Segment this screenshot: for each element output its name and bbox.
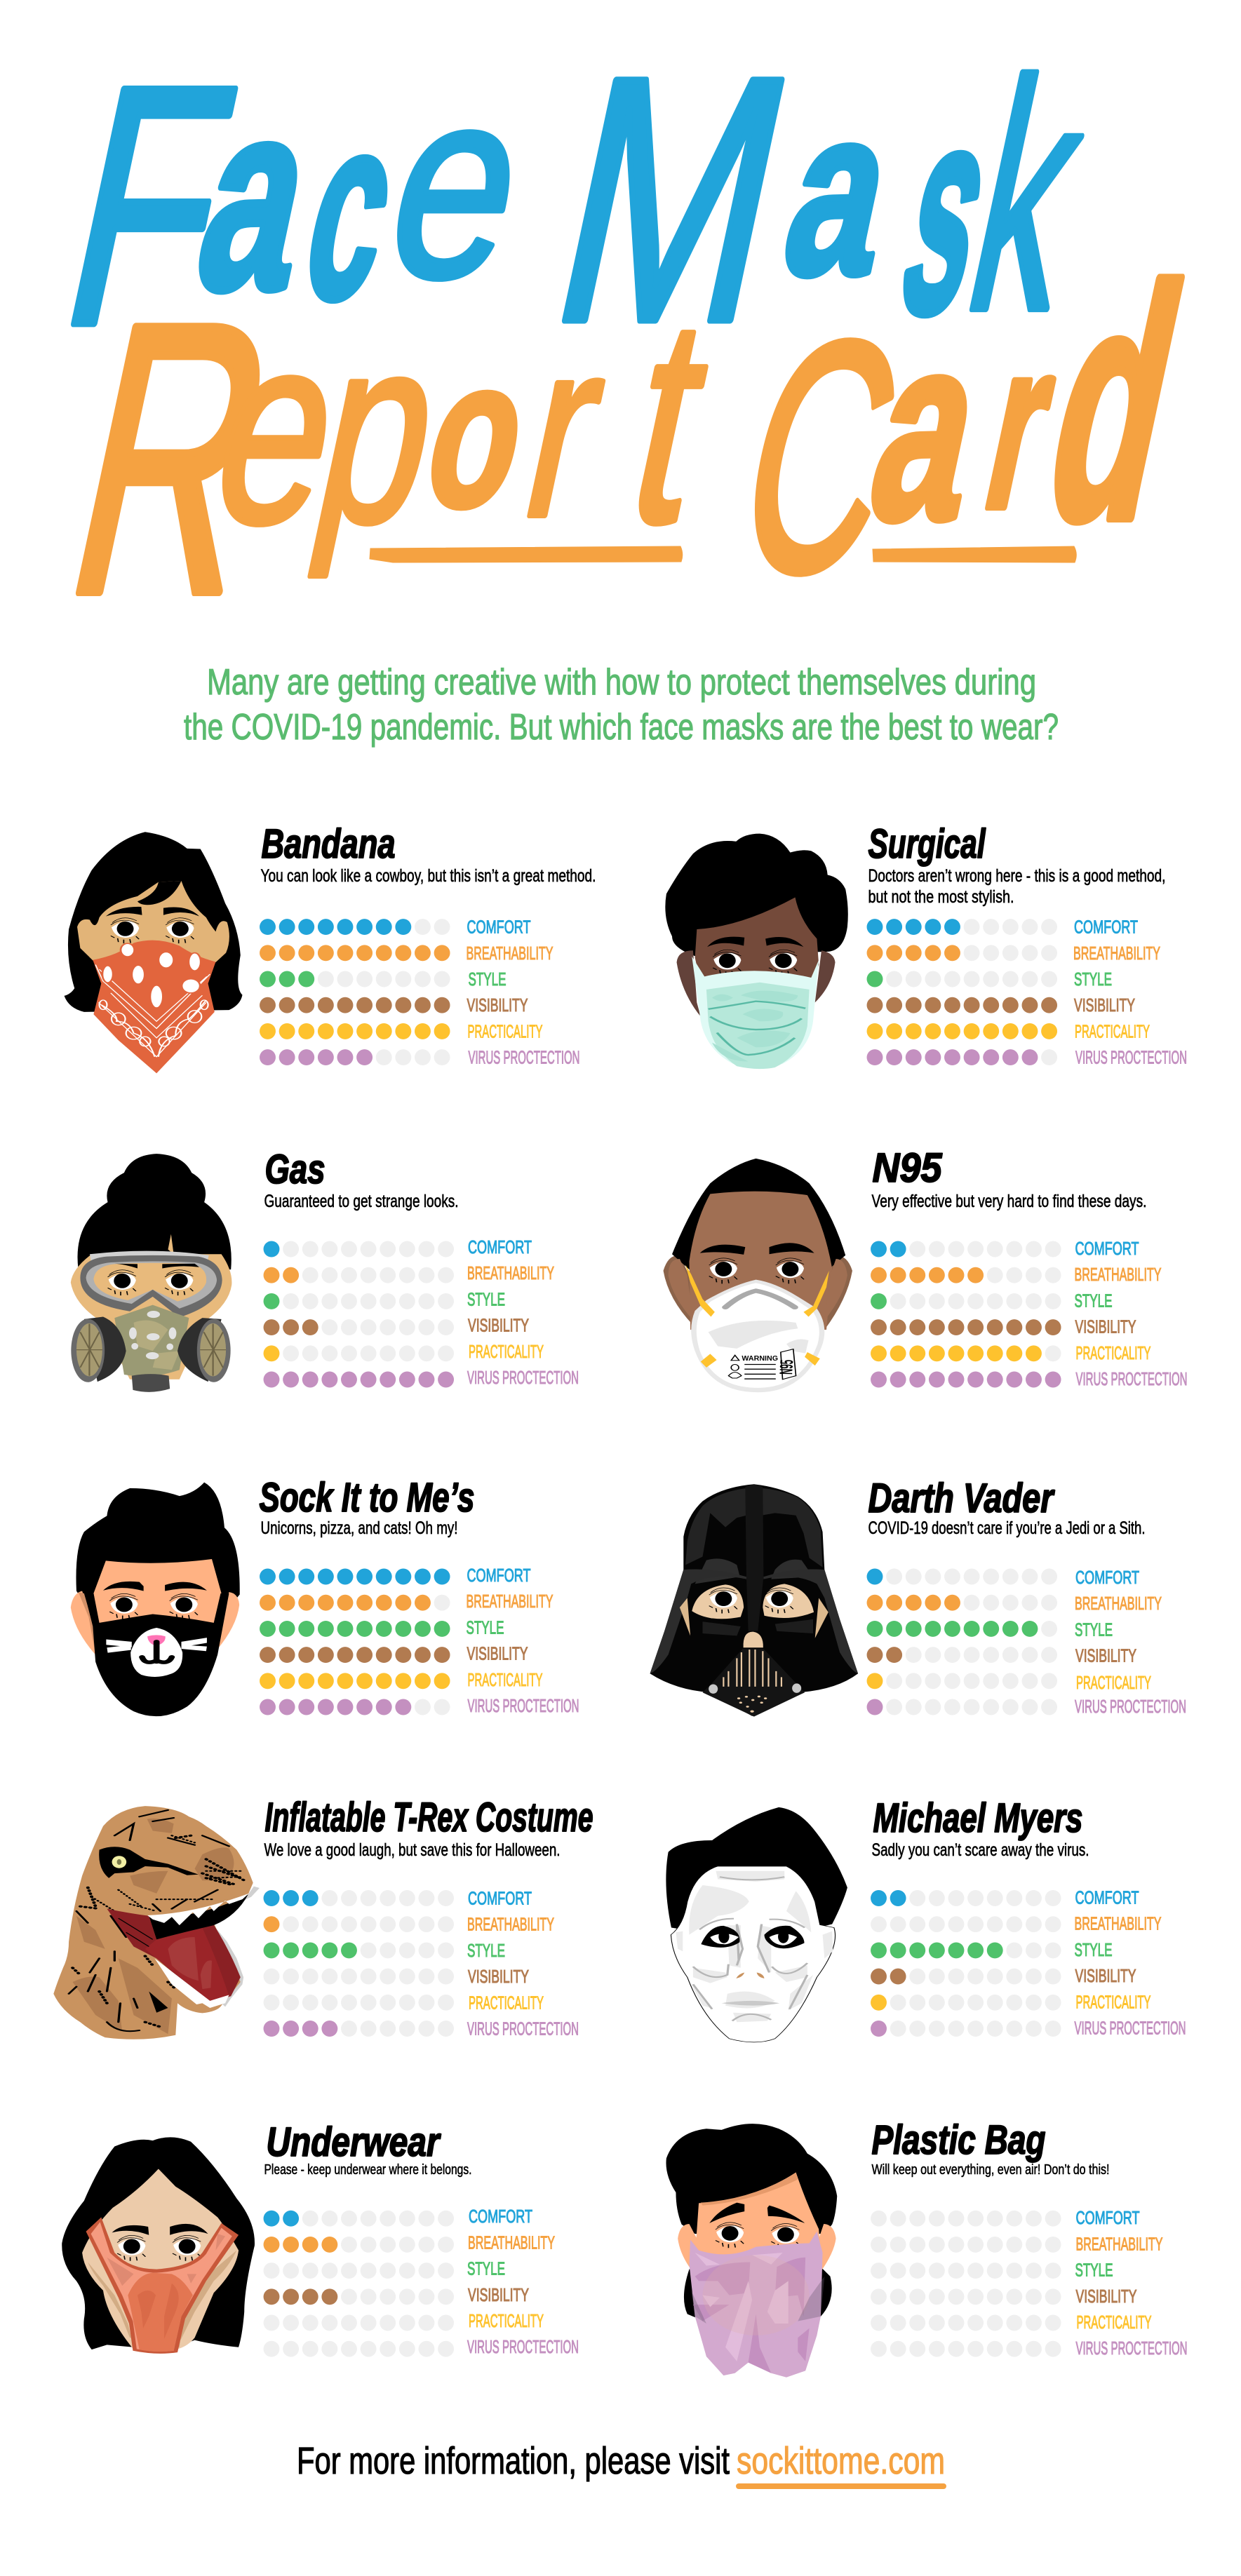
panel: N95 [664, 1145, 1187, 1392]
illustration: underwear face [62, 2137, 255, 2354]
title: Face Mask: F [39, 15, 260, 396]
rating: comfort: COMFORT [1076, 2207, 1140, 2228]
rating: breathability: BREATHABILITY [466, 943, 553, 964]
title: Face Mask [39, 5, 1113, 396]
intro text [184, 662, 1059, 748]
title: Face Mask: c [285, 63, 419, 352]
ratings: Surgical [875, 917, 1187, 1068]
ratings: Underwear [271, 2206, 579, 2357]
rating: breathability: BREATHABILITY [467, 1262, 554, 1283]
ratings: Bandana [268, 917, 579, 1068]
heading: Plastic Bag: Plastic Bag [871, 2117, 1045, 2163]
intro text: Many are getting creative with how to protect themselves during [207, 662, 1036, 703]
rating: comfort: COMFORT [1075, 1238, 1139, 1259]
ratings: Sock It to Me's [268, 1565, 579, 1716]
title: Report Card [41, 220, 1207, 674]
rating: visibility: VISIBILITY [468, 1315, 529, 1336]
rating: practicality: PRACTICALITY [1076, 1672, 1151, 1693]
surgical mask [692, 957, 819, 1069]
ratings: Inflatable T-Rex Costume [271, 1888, 579, 2039]
title: Report Card: o [409, 317, 546, 551]
rating: comfort: COMFORT [1074, 917, 1138, 938]
ratings: Michael Myers [878, 1887, 1186, 2038]
rating: visibility: VISIBILITY [1075, 1316, 1136, 1337]
rating: practicality: PRACTICALITY [1075, 1020, 1150, 1041]
rating: virus protection: VIRUS PROCTECTION [467, 2336, 579, 2357]
rating: breathability: BREATHABILITY [1073, 943, 1160, 964]
heading: N95: N95 [873, 1145, 942, 1191]
description: Surgical: but not the most stylish. [868, 887, 1014, 907]
cat face mask [85, 1593, 229, 1716]
panel: Bandana [65, 821, 596, 1073]
bandana mask [93, 940, 215, 1073]
description: Darth Vader: COVID-19 doesn’t care if you’re a Jedi or a Sith. [868, 1518, 1145, 1538]
heading: Michael Myers: Michael Myers [873, 1795, 1083, 1841]
illustration: bandana face [65, 832, 242, 1073]
rating: virus protection: VIRUS PROCTECTION [467, 1695, 579, 1716]
rating: comfort: COMFORT [467, 1565, 531, 1586]
panel: Gas [71, 1147, 579, 1392]
panel: Sock It to Me's [71, 1475, 579, 1716]
panel: Plastic Bag [666, 2117, 1187, 2378]
rating: visibility: VISIBILITY [467, 994, 528, 1016]
title: Report Card: t [608, 257, 733, 583]
rating: style: STYLE [467, 1940, 505, 1961]
title: Report Card: r [505, 288, 626, 569]
title: Face Mask: a [178, 48, 336, 345]
rating: comfort: COMFORT [469, 2206, 532, 2227]
rating: visibility: VISIBILITY [468, 1966, 529, 1987]
title: Report Card: e [193, 279, 365, 579]
description: Plastic Bag: Will keep out everything, even air! Don’t do this! [871, 2162, 1110, 2178]
footer text: For more information, please visit [297, 2440, 730, 2482]
illustration: N95 face [664, 1159, 852, 1392]
rating: breathability: BREATHABILITY [467, 1914, 554, 1935]
illustration: surgical face [665, 834, 848, 1069]
respirator [71, 1305, 231, 1392]
rating: style: STYLE [1075, 2260, 1113, 2281]
rating: style: STYLE [1074, 969, 1112, 990]
title: Report Card: r [967, 291, 1075, 558]
panel: Underwear [62, 2119, 579, 2357]
rating: visibility: VISIBILITY [1074, 994, 1135, 1016]
description: Surgical [868, 866, 1166, 907]
rating: style: STYLE [469, 969, 507, 990]
illustration: plastic bag face [666, 2124, 837, 2378]
description: N95: Very effective but very hard to find these days. [871, 1192, 1146, 1211]
title: Report Card: C [715, 273, 927, 640]
rating: practicality: PRACTICALITY [469, 1341, 544, 1362]
rating: practicality: PRACTICALITY [469, 2310, 544, 2331]
plastic bag mask [689, 2232, 824, 2378]
description: Underwear: Please - keep underwear where it belongs. [264, 2162, 471, 2178]
panel: Michael Myers [666, 1795, 1186, 2042]
rating: breathability: BREATHABILITY [1075, 1264, 1162, 1285]
rating: style: STYLE [1075, 1939, 1113, 1960]
panel: Surgical [665, 821, 1187, 1069]
rating: breathability: BREATHABILITY [466, 1591, 553, 1612]
rating: comfort: COMFORT [1075, 1887, 1139, 1908]
rating: style: STYLE [1075, 1619, 1113, 1640]
description: Gas: Guaranteed to get strange looks. [264, 1192, 459, 1211]
rating: visibility: VISIBILITY [467, 1643, 528, 1664]
rating: practicality: PRACTICALITY [1076, 2312, 1152, 2333]
rating: visibility: VISIBILITY [1076, 2286, 1136, 2307]
N95 respirator: WARNING [742, 1354, 778, 1362]
heading: Inflatable T-Rex Costume: Inflatable T-Rex Costume [265, 1795, 593, 1840]
ratings: N95 [878, 1238, 1187, 1389]
rating: breathability: BREATHABILITY [1075, 1593, 1162, 1614]
rating: style: STYLE [467, 2258, 505, 2279]
rating: comfort: COMFORT [468, 1236, 532, 1257]
N95 respirator [685, 1265, 829, 1392]
rating: practicality: PRACTICALITY [1076, 1991, 1151, 2012]
heading: Surgical: Surgical [868, 821, 986, 867]
illustration: T-Rex costume [53, 1806, 260, 2039]
title: Report Card: d [1024, 220, 1207, 588]
N95 respirator: N95 [777, 1360, 798, 1375]
rating: visibility: VISIBILITY [468, 2284, 529, 2305]
heading: Darth Vader: Darth Vader [868, 1476, 1055, 1521]
illustration: Darth Vader helmet [650, 1484, 858, 1717]
description: Inflatable T-Rex Costume: We love a good laugh, but save this for Halloween. [264, 1840, 560, 1860]
panel: Darth Vader [650, 1476, 1186, 1717]
rating: breathability: BREATHABILITY [1075, 1913, 1162, 1934]
title: Report Card: a [851, 283, 1005, 574]
rating: comfort: COMFORT [468, 1888, 532, 1909]
rating: visibility: VISIBILITY [1075, 1645, 1136, 1666]
title: Face Mask: s [880, 48, 1015, 374]
rating: comfort: COMFORT [1075, 1567, 1139, 1588]
heading: Underwear: Underwear [267, 2119, 441, 2165]
rating: comfort: COMFORT [467, 917, 531, 938]
description: Sock It to Me's: Unicorns, pizza, and cats! Oh my! [261, 1518, 457, 1538]
rating: breathability: BREATHABILITY [1076, 2233, 1163, 2254]
rating: style: STYLE [1075, 1290, 1113, 1311]
rating: practicality: PRACTICALITY [1076, 1342, 1151, 1363]
rating: practicality: PRACTICALITY [467, 1669, 543, 1690]
title: Face Mask: k [945, 15, 1113, 378]
description: Bandana: You can look like a cowboy, but this isn’t a great method. [261, 866, 596, 886]
rating: virus protection: VIRUS PROCTECTION [467, 1367, 579, 1388]
underwear mask [86, 2218, 239, 2354]
description: Michael Myers: Sadly you can’t scare away the virus. [871, 1840, 1089, 1860]
heading: Bandana: Bandana [261, 821, 396, 867]
rating: practicality: PRACTICALITY [469, 1992, 544, 2013]
footer text: sockittome.com [737, 2440, 945, 2482]
illustration: gas mask face [71, 1154, 232, 1392]
illustration: cat mask face [71, 1483, 240, 1716]
heading: Sock It to Me's: Sock It to Me’s [260, 1475, 474, 1520]
rating: practicality: PRACTICALITY [467, 1020, 543, 1041]
title: Face Mask: e [367, 34, 550, 334]
ratings: Gas [271, 1236, 579, 1388]
illustration: Michael Myers mask [666, 1807, 847, 2042]
ratings: Darth Vader [875, 1567, 1186, 1717]
rating: style: STYLE [466, 1617, 504, 1638]
title: Face Mask: a [767, 60, 914, 324]
rating: virus protection: VIRUS PROCTECTION [467, 2018, 579, 2039]
title: Face Mask: M [529, 5, 818, 393]
panel: Inflatable T-Rex Costume [53, 1795, 593, 2039]
heading: Gas: Gas [265, 1147, 326, 1192]
mouth and teeth [147, 1894, 249, 2008]
rating: virus protection: VIRUS PROCTECTION [469, 1047, 579, 1068]
title: Report Card: p [297, 283, 464, 579]
rating: breathability: BREATHABILITY [468, 2232, 555, 2253]
rating: visibility: VISIBILITY [1075, 1965, 1136, 1986]
rating: style: STYLE [467, 1288, 505, 1309]
ratings: Plastic Bag [878, 2207, 1187, 2359]
title: Report Card: R [41, 244, 305, 674]
